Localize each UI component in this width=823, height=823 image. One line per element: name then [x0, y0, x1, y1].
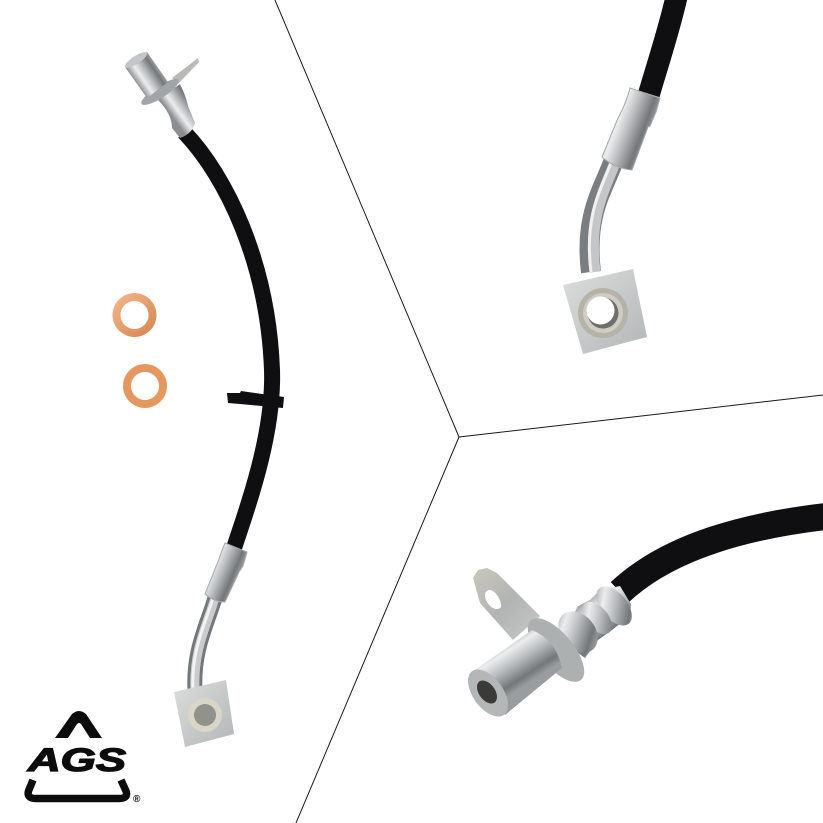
panel: full brake hose [123, 50, 284, 747]
bottom crimp and tube [193, 543, 247, 690]
threaded end [460, 662, 516, 724]
crimp collar [602, 88, 660, 170]
logo wordmark: AGS [27, 742, 127, 778]
logo top chevron [55, 711, 102, 738]
washer 2 [123, 364, 167, 408]
hose body [184, 132, 272, 548]
copper washers [113, 293, 167, 408]
washer 1 [113, 293, 157, 337]
square block with port [563, 269, 647, 354]
bottom square block [174, 680, 234, 747]
bent steel tube [589, 160, 616, 272]
barrel [472, 630, 562, 715]
AGS logo [27, 711, 141, 805]
panel: tube fitting detail [563, 0, 677, 354]
hose close-up [620, 516, 823, 592]
registered mark: ® [133, 794, 141, 805]
crimp ribs [550, 580, 639, 661]
top banjo fitting [123, 50, 199, 138]
logo bottom bracket [28, 780, 127, 798]
flange [518, 609, 594, 691]
retaining clip [227, 391, 284, 408]
mounting tab [473, 568, 540, 640]
panel: banjo fitting detail [460, 516, 823, 724]
hose close-up [649, 0, 677, 94]
panel dividers [275, 0, 823, 823]
